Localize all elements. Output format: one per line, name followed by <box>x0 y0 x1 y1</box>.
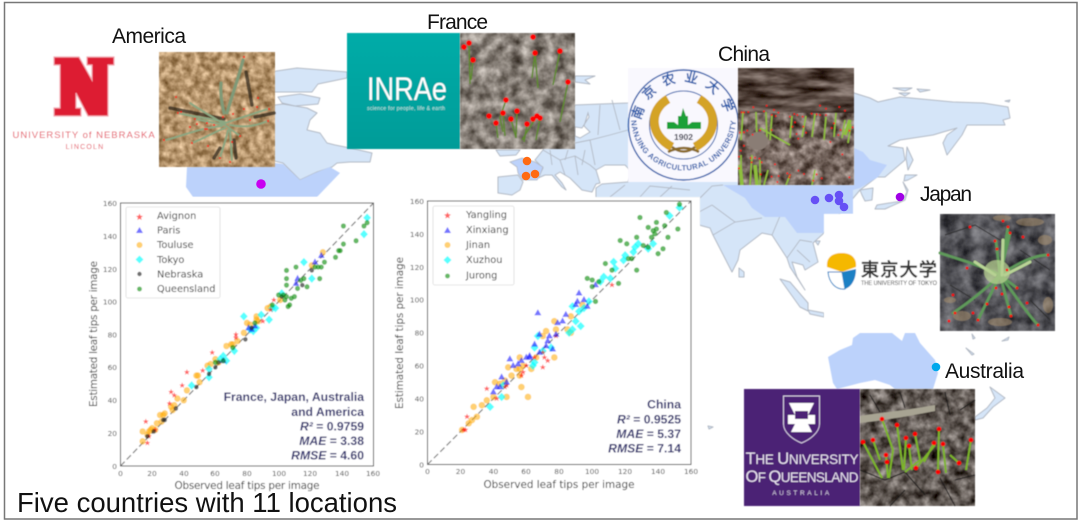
logo: Nanjing Agricultural University: NANJING AGRICULTURAL UNIVERSITY <box>630 120 736 171</box>
map: Australia <box>828 333 938 389</box>
map: France <box>510 158 543 180</box>
site markers <box>256 157 940 371</box>
marker: China sites <box>811 191 848 211</box>
legend: Queensland <box>157 284 215 295</box>
logo: University of Queensland: THE UNIVERSITY <box>746 450 858 468</box>
photo: France wheat seedlings <box>460 33 575 149</box>
country label: China: China <box>718 43 770 66</box>
map: Sakhalin, Japan and Korea <box>860 147 917 209</box>
logo: University of Nebraska-Lincoln: LINCOLN <box>66 144 104 151</box>
axis tick labels: 40 <box>415 394 424 404</box>
axis tick labels: 160 <box>684 467 698 476</box>
axis tick labels: 160 <box>366 469 380 478</box>
axis tick labels: 20 <box>456 467 465 476</box>
plot area with one-to-one line <box>428 201 691 464</box>
scatter points <box>143 218 367 443</box>
statistics: China: RMSE = 7.14 <box>608 442 681 456</box>
footer caption: Five countries with 11 locations <box>17 487 397 518</box>
panel: right scatter chart <box>385 197 700 491</box>
axis tick labels: 80 <box>554 467 564 476</box>
axis tick labels: 0 <box>112 462 117 471</box>
map: Spain <box>498 175 523 195</box>
logo: University of Tokyo <box>824 214 940 332</box>
axis tick labels: 60 <box>108 363 117 372</box>
logo: INRAE <box>347 33 460 149</box>
axis tick labels: 80 <box>242 469 252 478</box>
x axis label: Observed leaf tips per image <box>174 480 320 492</box>
axis tick labels: 80 <box>108 330 117 340</box>
statistics: China <box>608 398 681 456</box>
map: China <box>723 148 887 233</box>
axis tick labels: 160 <box>410 197 424 206</box>
axis tick labels: 140 <box>335 469 349 478</box>
legend: Avignon <box>157 211 196 222</box>
axis tick labels: 100 <box>272 469 286 478</box>
legend: Nebraska <box>157 270 203 280</box>
axis tick labels: 0 <box>419 460 424 470</box>
axis tick labels: 20 <box>147 469 157 478</box>
map: Arctic Canada islands <box>270 68 347 106</box>
statistics: France, Japan, Australia and America: RMSE = 4.60 <box>291 448 364 462</box>
axis tick labels: 60 <box>521 467 531 476</box>
logo: University of Nebraska-Lincoln <box>10 50 157 155</box>
axis tick labels <box>103 199 380 478</box>
statistics: France, Japan, Australia and America <box>224 390 364 462</box>
map: Eurasia <box>535 85 1010 290</box>
axis tick labels: 120 <box>618 467 632 476</box>
marker: Japan site <box>896 193 904 201</box>
logo: University of Queensland: AUSTRALIA <box>772 490 832 497</box>
legend: Xuzhou <box>466 255 502 266</box>
statistics: China: R² = 0.9525 <box>617 412 681 426</box>
legend: Jinan <box>465 240 490 251</box>
statistics: China: China <box>647 398 681 412</box>
axis tick labels: 120 <box>103 265 117 274</box>
legend <box>126 207 220 298</box>
marker: America site <box>256 179 266 189</box>
scatter points <box>462 204 679 430</box>
statistics: China: MAE = 5.37 <box>616 427 681 441</box>
axis tick labels <box>410 197 698 476</box>
axis tick labels: 80 <box>415 328 424 338</box>
axis tick labels: 100 <box>410 296 424 304</box>
statistics: France, Japan, Australia and America: MAE = 3.38 <box>299 434 364 448</box>
axis tick labels: 120 <box>410 263 424 272</box>
photo: China wheat seedlings <box>738 68 854 185</box>
legend: Paris <box>157 226 180 236</box>
map: Arctic Russian islands <box>575 76 1010 102</box>
axis tick labels: 60 <box>415 362 424 370</box>
axis tick labels: 160 <box>103 199 117 208</box>
legend: Tokyo <box>156 255 184 266</box>
photo: Australia wheat seedlings <box>860 389 975 506</box>
map: New Zealand and Pacific islands <box>708 334 1009 429</box>
statistics: France, Japan, Australia and America: R² = 0.9759 <box>300 420 364 434</box>
legend: Xinxiang <box>466 225 509 236</box>
axis tick labels: 140 <box>410 230 424 239</box>
axis tick labels: 0 <box>425 467 430 476</box>
axis tick labels: 20 <box>108 429 117 438</box>
country label: America: America <box>112 25 186 48</box>
legend: Jurong <box>465 270 497 282</box>
axis tick labels: 120 <box>303 469 317 478</box>
legend: Yangling <box>465 210 507 221</box>
logo: University of Queensland: OF QUEENSLAND <box>746 468 859 486</box>
axis tick labels: 40 <box>108 396 117 405</box>
photo: America wheat plant <box>159 52 275 167</box>
logo: University of Tokyo: THE UNIVERSITY OF TOKYO <box>861 280 937 287</box>
logo: Nanjing Agricultural University: 1902 <box>674 132 693 142</box>
axis tick labels: 100 <box>585 467 599 476</box>
map: United States <box>186 163 340 197</box>
legend: Touluse <box>156 240 194 251</box>
photo: Japan wheat plant <box>940 214 1055 331</box>
axis tick labels: 20 <box>415 428 424 436</box>
axis tick labels: 40 <box>489 467 498 476</box>
logo: University of Nebraska-Lincoln: UNIVERSITY of NEBRASKA <box>12 130 156 141</box>
logo: INRAE: INRAe <box>367 71 447 107</box>
statistics: France, Japan, Australia and America: France, Japan, Australia <box>224 390 364 404</box>
map: Baltic sea <box>575 113 590 138</box>
axis tick labels: 0 <box>118 469 123 478</box>
axis tick labels: 40 <box>179 469 189 478</box>
logo: Nanjing Agricultural University: 南京农业大学 <box>630 70 736 120</box>
logo: INRAE: science for people, life & earth <box>367 106 445 112</box>
map: Canada <box>270 104 372 180</box>
panel: left scatter chart <box>85 197 385 492</box>
logo: University of Queensland <box>744 389 860 506</box>
logo: University of Tokyo: 東京大学 <box>861 259 938 280</box>
x axis label: Observed leaf tips per image <box>484 479 634 491</box>
statistics: France, Japan, Australia and America: and America <box>291 405 364 419</box>
axis tick labels: 100 <box>103 298 117 306</box>
country label: Japan: Japan <box>920 183 972 206</box>
marker: Australia site <box>932 363 940 371</box>
plot area with one-to-one line <box>120 203 374 466</box>
y axis label: Estimated leaf tips per image <box>394 257 406 409</box>
axis tick labels: 140 <box>651 467 665 476</box>
y axis label: Estimated leaf tips per image <box>88 261 100 407</box>
axis tick labels: 140 <box>103 232 117 241</box>
world map <box>186 68 1010 429</box>
map: Sri Lanka and Southeast Asian islands <box>739 241 824 317</box>
country label: Australia: Australia <box>945 360 1024 383</box>
legend <box>433 206 514 285</box>
marker: France sites <box>522 157 539 180</box>
logo: Nanjing Agricultural University <box>627 68 739 182</box>
map: European and Asian borders <box>543 100 812 262</box>
country label: France: France <box>427 11 488 34</box>
axis tick labels: 60 <box>210 469 220 478</box>
map: United Kingdom <box>496 150 520 156</box>
